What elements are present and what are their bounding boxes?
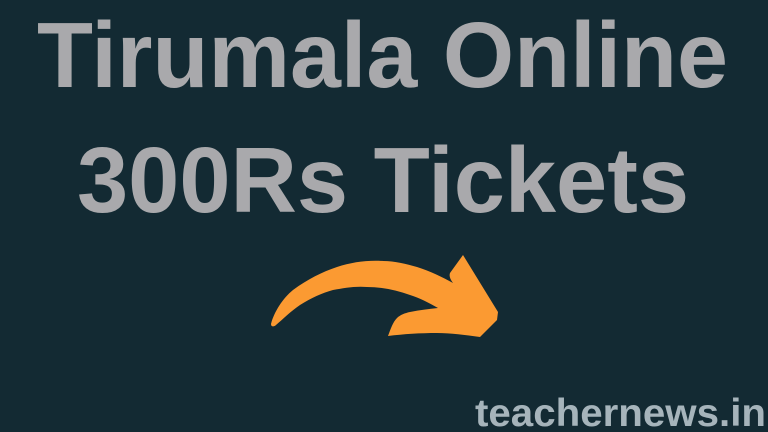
title: first line: Tirumala Online [37,3,728,107]
title: second line: 300Rs Tickets [77,128,689,232]
icon: curved orange arrow [271,255,498,337]
